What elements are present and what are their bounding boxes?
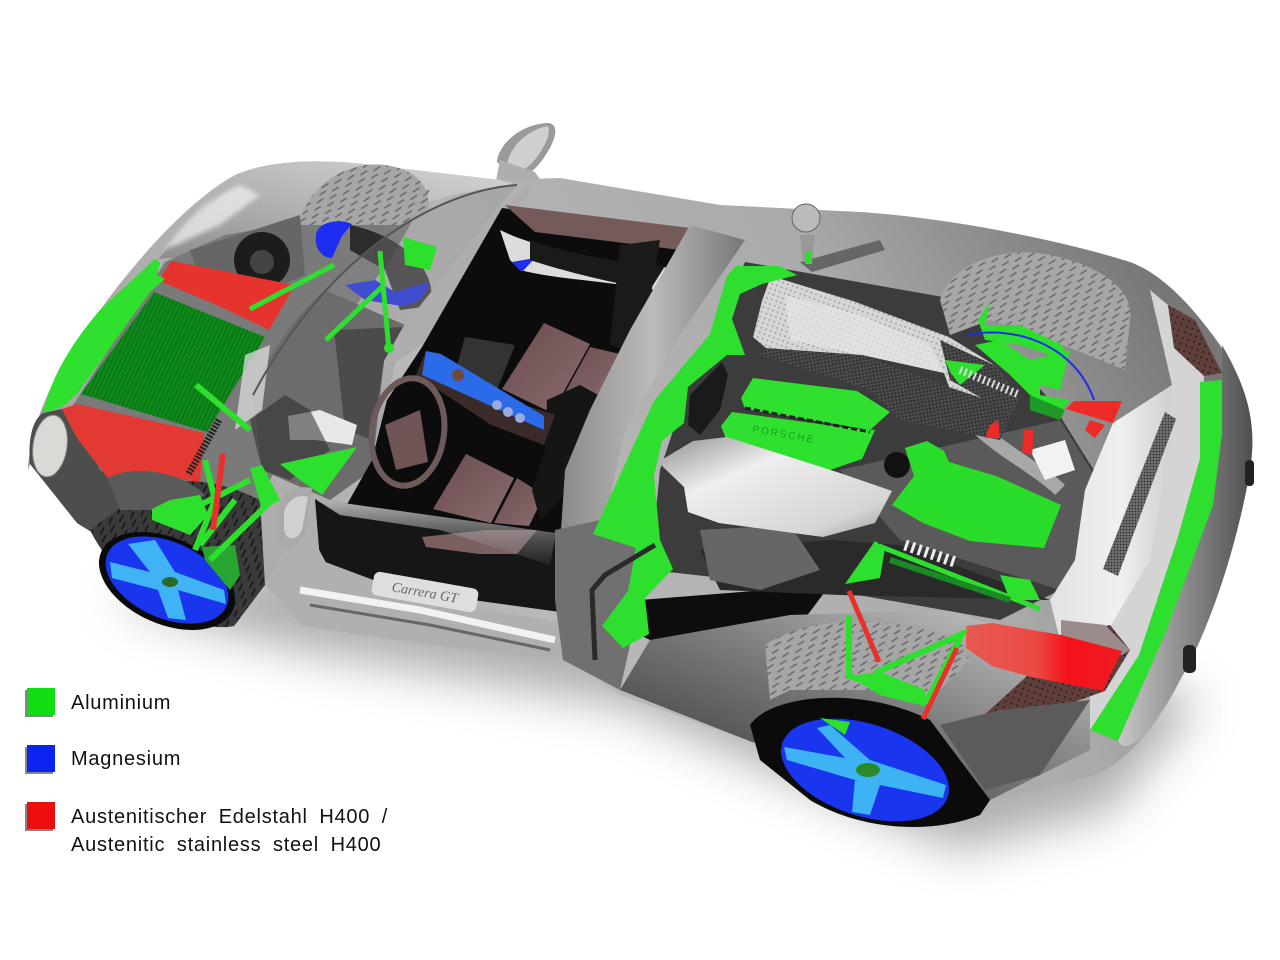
ground shadow: [110, 560, 1200, 850]
legend: magnesium: [25, 745, 181, 774]
rear taillight upper: [1168, 305, 1222, 376]
magnesium front far wheel: [316, 221, 428, 306]
engine valve covers: PORSCHE: [751, 424, 816, 446]
speaker: [190, 215, 305, 300]
radiator: [81, 292, 265, 432]
near mirror: [276, 487, 312, 547]
hood highlight: [165, 185, 260, 250]
cabin interior: [315, 205, 690, 612]
silver intake plenum: [658, 437, 892, 537]
legend: stainless steel: Austenitischer Edelstahl H400 /: [71, 806, 388, 828]
legend: stainless steel: Austenitic stainless steel H400: [71, 834, 381, 856]
rear corner shading: [1118, 345, 1252, 746]
rear exhaust tips: [1183, 460, 1254, 673]
rear spring far: [960, 370, 1020, 395]
steel rear silencer: [966, 623, 1122, 691]
front far tyre: [300, 164, 429, 225]
near rear suspension aluminium: [845, 541, 1040, 719]
A pillar: [384, 187, 533, 368]
front hood: [158, 161, 517, 259]
steel duct lower: [62, 404, 204, 482]
rear door shut / lower panel: [555, 520, 650, 690]
red rear rods: [849, 591, 957, 719]
car body: [28, 161, 1252, 800]
windscreen arc: [253, 185, 517, 395]
magnesium brake line: [968, 333, 1094, 400]
rear vent: [1103, 412, 1176, 576]
rear taillight lower: [983, 620, 1130, 716]
legend: [25, 688, 388, 856]
carbon lower: [760, 348, 1014, 440]
aluminium rear bumper beam: [1090, 380, 1222, 741]
front wheel arch and tyre: [84, 471, 265, 650]
legend: aluminium: [25, 688, 171, 717]
seat back shell: [532, 385, 598, 520]
aluminium rear bulkhead: [593, 266, 797, 648]
aluminium front bumper beam: [43, 259, 165, 413]
rear quarter panel: [620, 610, 1090, 800]
far rear brake aluminium: [945, 302, 1070, 420]
mirror: [495, 123, 555, 186]
dark throttle cap: [884, 452, 910, 478]
near seat: [422, 454, 544, 554]
steel duct upper: [162, 261, 295, 330]
dashboard and firewall: [235, 290, 405, 500]
front nose dark corner: [30, 409, 130, 533]
carpet panel: [450, 337, 515, 395]
legend: aluminium: Aluminium: [71, 692, 171, 714]
centre console: [416, 351, 555, 445]
airbox: [753, 276, 1018, 409]
sill badge: Carrera GT: [391, 580, 460, 607]
engine valve covers: [721, 378, 890, 471]
rear magnesium wheel: [768, 699, 962, 841]
near rear wheel arch and tyre: [750, 698, 1090, 841]
steering wheel: [365, 374, 451, 490]
aluminium transmission: [892, 441, 1061, 548]
black reservoir: [688, 362, 728, 435]
anti-roll bar: [592, 545, 655, 660]
transparent door glass: [315, 499, 556, 565]
engine bay: [650, 262, 1110, 620]
footwell and door lower: [315, 499, 560, 612]
door sill: [265, 520, 563, 660]
rear deck: [1090, 290, 1204, 730]
headlight: [29, 413, 71, 479]
sill badge: [371, 571, 479, 613]
far rear tyre: [940, 252, 1130, 370]
top rear strut brace: [792, 204, 885, 272]
door panel far side: [500, 230, 670, 290]
windscreen glass area: [253, 185, 517, 500]
front suspension aluminium: [152, 237, 437, 590]
rear muffler and silver panel: [1050, 385, 1190, 660]
far red steel parts: [985, 401, 1122, 455]
rear lower intake: [640, 585, 830, 645]
rear near tyre top: [765, 621, 970, 700]
front magnesium wheel: [92, 519, 242, 641]
legend: magnesium: Magnesium: [71, 748, 181, 770]
legend: stainless steel: [25, 802, 388, 856]
front compartment: [70, 164, 432, 530]
far seat: [502, 323, 620, 413]
hose: [975, 425, 1060, 490]
front spring: [188, 420, 219, 475]
B pillar: [560, 225, 745, 545]
front strut rod: [213, 454, 223, 530]
